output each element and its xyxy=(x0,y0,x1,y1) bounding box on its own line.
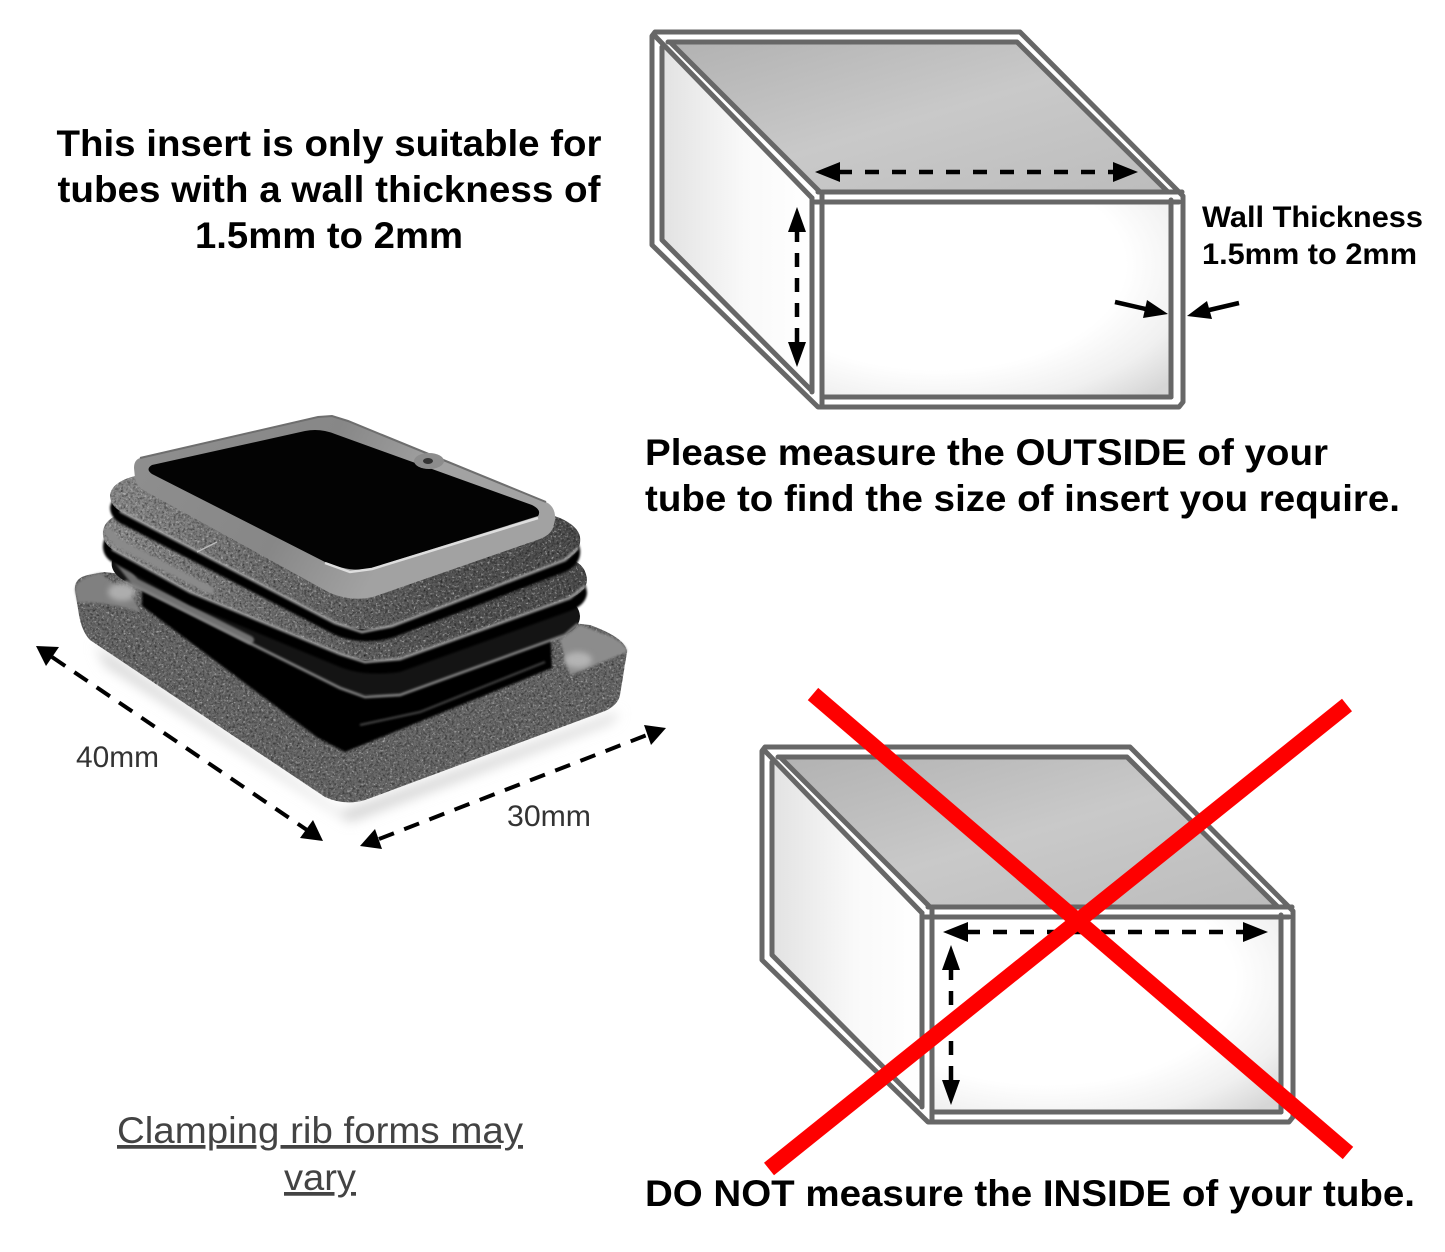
front face xyxy=(932,918,1281,1112)
top face xyxy=(782,759,1278,907)
rib two left band xyxy=(108,532,210,590)
note: clamping rib forms xyxy=(117,1109,523,1198)
top face xyxy=(672,44,1168,192)
red cross xyxy=(769,694,1348,1169)
rib three xyxy=(112,540,580,696)
diagram: outside measurement box xyxy=(652,32,1183,407)
arrows: wall thickness xyxy=(1115,300,1239,319)
rib one lip xyxy=(120,511,578,632)
instruction: measure outside: tube to find the size of insert you require. xyxy=(645,477,1400,519)
rib one xyxy=(110,440,580,629)
left face xyxy=(662,45,812,390)
moulding dot xyxy=(414,453,444,469)
arrow: inside height xyxy=(942,945,960,1105)
rib two xyxy=(103,500,587,661)
note: clamping rib forms: vary xyxy=(284,1156,356,1198)
heading: wall thickness suitability xyxy=(56,122,602,256)
dimension arrow: 40mm xyxy=(36,646,323,841)
instruction: measure outside: Please measure the OUTSIDE of your xyxy=(645,431,1328,473)
base right highlight xyxy=(564,652,592,668)
label: wall thickness xyxy=(1202,201,1423,271)
heading: wall thickness suitability: This insert is only suitable for xyxy=(56,122,602,164)
collar xyxy=(134,416,555,599)
collar opening xyxy=(148,430,539,570)
heading: wall thickness suitability: 1.5mm to 2mm xyxy=(195,214,463,256)
dimension arrow: 30mm xyxy=(360,725,666,849)
base left highlight xyxy=(108,583,136,601)
rib two shadow xyxy=(103,513,587,674)
label: wall thickness: 1.5mm to 2mm xyxy=(1202,238,1417,271)
base flange side xyxy=(75,572,627,802)
arrow: width dimension xyxy=(815,162,1138,182)
collar outer back edge xyxy=(140,416,546,502)
label: 30mm: 30mm xyxy=(507,800,591,833)
base right lobe xyxy=(560,625,627,675)
recess gloss xyxy=(360,662,545,725)
heading: wall thickness suitability: tubes with a wall thickness of xyxy=(58,168,601,210)
arrow: inside width xyxy=(943,922,1268,942)
note: clamping rib forms: Clamping rib forms may xyxy=(117,1109,523,1151)
warning: do not measure inside: DO NOT measure the INSIDE of your tube. xyxy=(645,1172,1415,1214)
label: wall thickness: Wall Thickness xyxy=(1202,201,1423,234)
photo: plastic tube insert xyxy=(36,416,666,849)
collar rim highlight xyxy=(325,518,538,572)
rib two lip xyxy=(112,549,585,662)
shadow xyxy=(95,645,620,822)
rib seam xyxy=(197,542,217,552)
arrow: height dimension xyxy=(788,207,806,367)
instruction: measure outside xyxy=(645,431,1400,519)
label: 40mm: 40mm xyxy=(76,741,159,774)
left face xyxy=(772,760,922,1105)
rib one shadow xyxy=(110,452,580,641)
base left lobe xyxy=(75,573,140,612)
diagram: inside measurement box (incorrect) xyxy=(762,747,1293,1122)
black recess xyxy=(142,570,552,752)
rib three left band xyxy=(118,560,250,640)
rib three lip xyxy=(125,581,578,697)
front face xyxy=(822,203,1171,397)
